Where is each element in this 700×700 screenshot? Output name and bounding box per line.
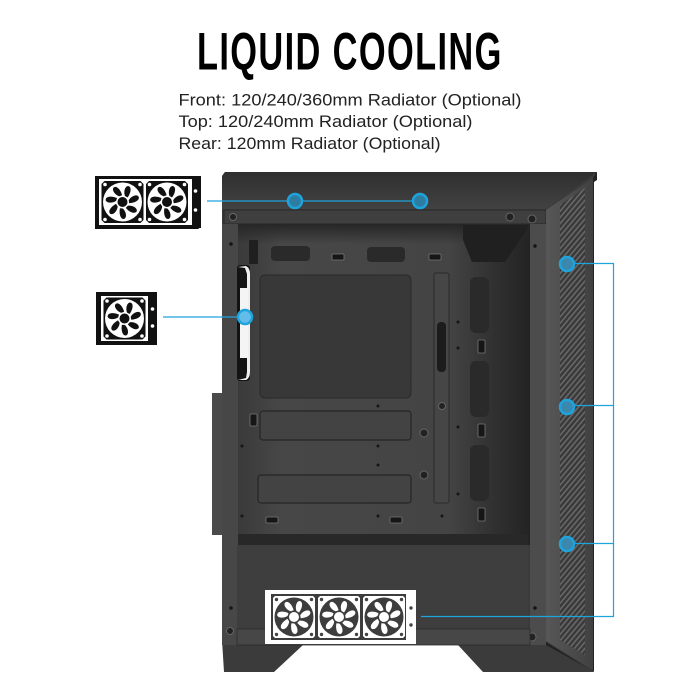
case body silhouette	[222, 172, 597, 672]
specifications text: Front: 120/240/360mm Radiator (Optional)	[178, 90, 522, 110]
vertical strip	[434, 273, 449, 503]
top left cutout small	[249, 240, 258, 264]
cable cutouts	[271, 246, 489, 501]
left side bracket	[212, 393, 223, 535]
motherboard large cutout	[260, 275, 411, 398]
PSU vent strip	[238, 534, 528, 545]
interior upper shadow	[238, 224, 530, 244]
rear fan opening	[237, 265, 250, 381]
callout dots	[238, 194, 574, 551]
rear fan white frame	[238, 266, 250, 380]
rear fan white blade	[240, 288, 248, 358]
icon: 240mm radiator	[95, 176, 201, 229]
cable opening top right	[463, 225, 530, 262]
specifications text	[178, 90, 522, 153]
front panel edge	[546, 172, 597, 672]
left rail	[222, 224, 238, 645]
bottom rail	[237, 629, 530, 645]
top panel	[222, 172, 597, 209]
interior motherboard tray	[238, 224, 530, 545]
title: LIQUID COOLING	[197, 23, 503, 81]
tie-down holes	[250, 254, 485, 523]
strip slot	[437, 322, 446, 372]
expansion slot panel upper	[260, 411, 411, 440]
icon: 360mm radiator	[265, 590, 416, 644]
small holes	[229, 242, 537, 610]
screw standoffs	[226, 213, 536, 641]
front radiator bracket	[421, 264, 614, 616]
front panel	[546, 178, 593, 670]
expansion slot panel lower	[258, 475, 411, 503]
right rail	[530, 224, 546, 645]
specifications text: Top: 120/240mm Radiator (Optional)	[178, 112, 472, 131]
top rail	[224, 210, 546, 224]
PC case	[212, 172, 597, 672]
PSU shroud	[237, 545, 528, 630]
icon: 120mm radiator	[96, 292, 157, 345]
specifications text: Rear: 120mm Radiator (Optional)	[178, 134, 440, 153]
top radiator connector line	[207, 200, 420, 202]
rear radiator connector line	[163, 316, 245, 318]
front mesh	[560, 188, 585, 655]
